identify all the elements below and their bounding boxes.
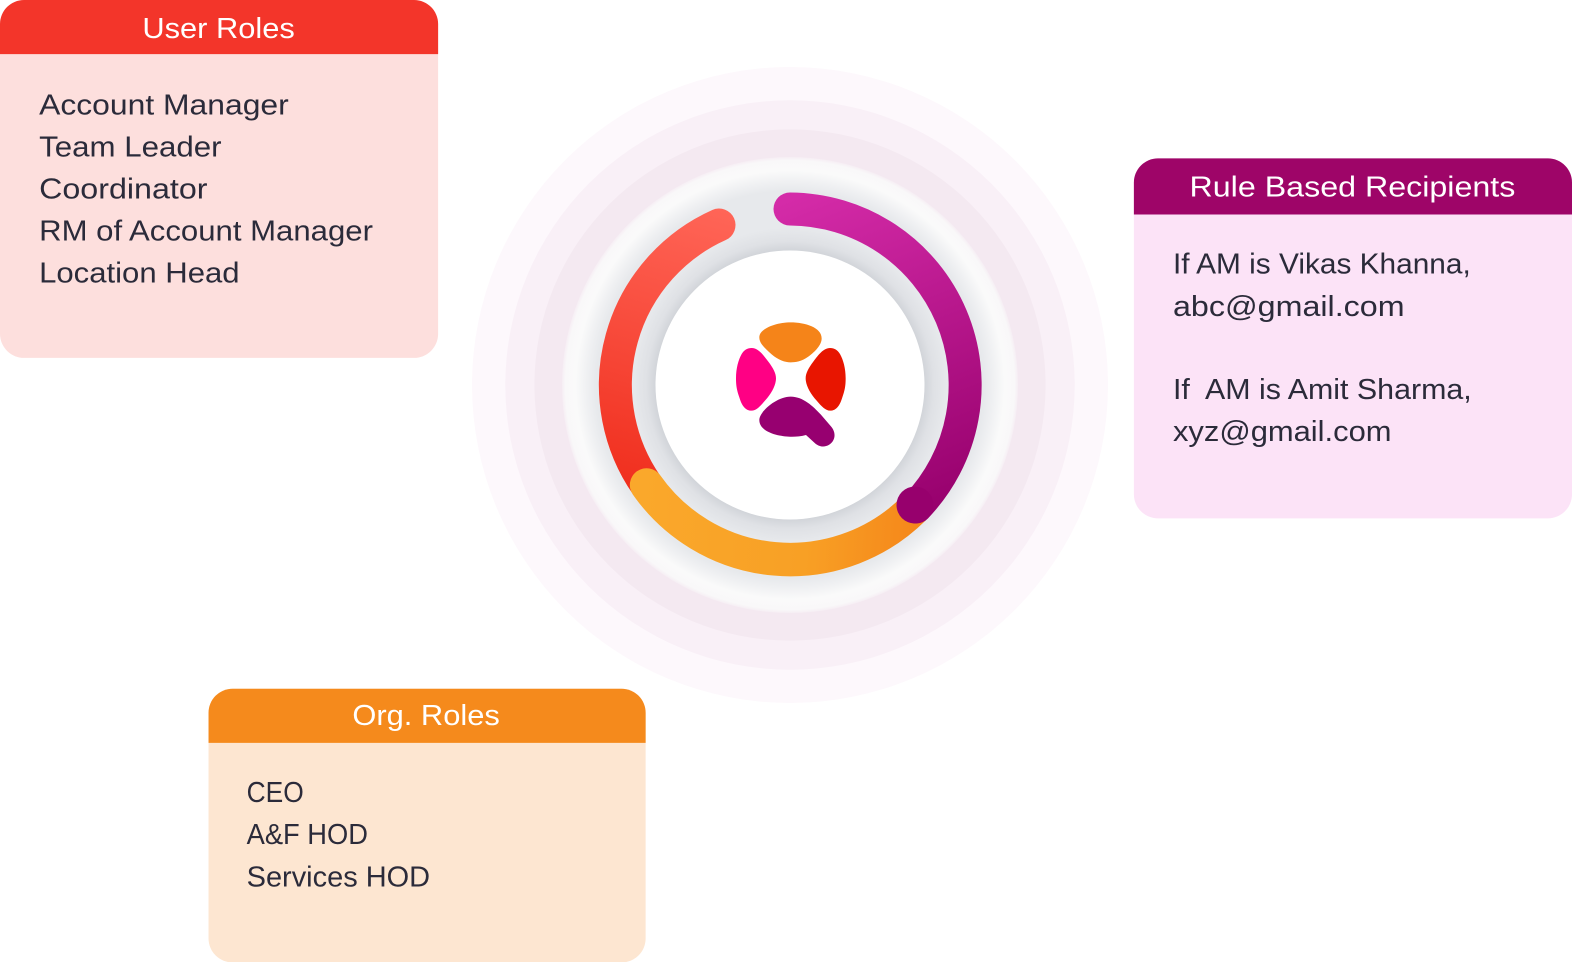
text: rule one: abc@gmail.com [1173,291,1405,323]
list: org roles: A&F HOD [247,819,368,851]
panel: Org. Roles [209,689,646,962]
list: user roles: Coordinator [39,174,208,206]
centre white circle [656,250,924,520]
list: user roles: Team Leader [39,131,222,163]
list: org roles: Services HOD [247,861,430,893]
header: User Roles [0,0,438,54]
text: rule one [1173,249,1471,323]
header: Rule Based Recipients: Rule Based Recipients [1190,171,1515,203]
central ring diagram [472,67,1108,703]
header: User Roles: User Roles [142,13,295,45]
list: user roles: RM of Account Manager [39,216,373,248]
list: org roles [247,777,430,893]
arc: orange segment [647,485,914,560]
header: Org. Roles [209,689,646,743]
header: Org. Roles: Org. Roles [352,700,500,732]
arc: purple segment [790,209,965,524]
list: org roles: CEO [247,777,304,809]
header: Rule Based Recipients [1134,158,1572,215]
list: user roles [39,89,373,290]
text: rule one: If AM is Vikas Khanna, [1173,249,1471,281]
list: user roles: Account Manager [39,89,289,121]
text: rule two: If AM is Amit Sharma, [1173,374,1472,406]
halo rings [472,67,1108,703]
panel: User Roles [0,0,438,358]
arc: red segment [615,225,719,485]
list: user roles: Location Head [39,258,240,290]
grey dial [562,157,1018,613]
text: rule two: xyz@gmail.com [1173,416,1392,448]
text: rule two [1173,374,1472,448]
panel: Rule Based Recipients [1134,158,1572,518]
icon: logo [736,322,846,447]
